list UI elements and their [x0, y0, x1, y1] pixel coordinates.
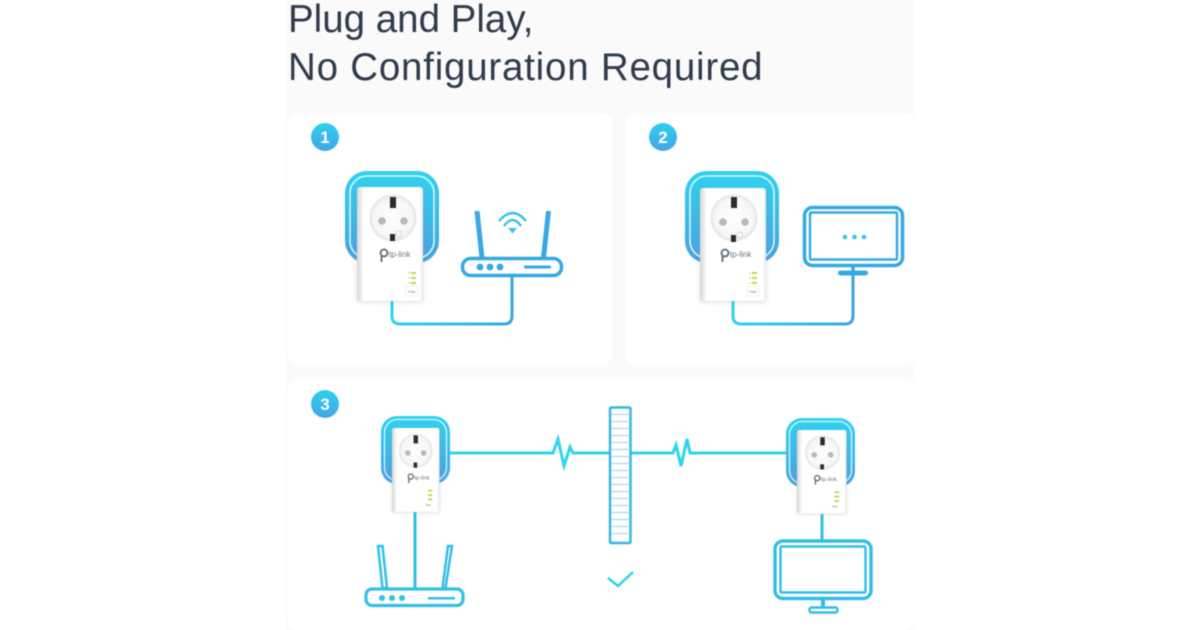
- left wall plate and adapter: tp-link: [414, 475, 430, 481]
- router: [462, 211, 562, 276]
- step 2 badge: 2: [658, 128, 668, 147]
- step 1 badge: [311, 123, 339, 151]
- left wall plate and adapter: Pair: [426, 503, 431, 507]
- right wall plate and adapter: Pair: [832, 504, 838, 508]
- step 1 badge: 1: [320, 128, 330, 147]
- title: No Configuration Required: [288, 46, 763, 89]
- panel: step 3: [288, 379, 915, 630]
- wall plate and adapter: Pair: [408, 289, 416, 294]
- wall plate and adapter: [685, 171, 779, 302]
- cable: left adapter to router: [414, 512, 416, 589]
- cable: adapter to router: [392, 276, 512, 324]
- background panel: [285, 0, 915, 630]
- step 2 badge: [649, 123, 677, 151]
- cable: adapter to monitor: [733, 272, 853, 324]
- monitor outline: [775, 541, 871, 612]
- monitor: [804, 208, 902, 275]
- router outline: [366, 546, 463, 606]
- panel: step 1: [288, 113, 612, 365]
- left wall plate and adapter: [381, 416, 450, 513]
- step 3 badge: [311, 390, 339, 418]
- icon: check mark: [608, 572, 633, 586]
- right wall plate and adapter: tp-link: [821, 477, 837, 483]
- powerline with interference: [449, 439, 787, 466]
- wall: [610, 408, 630, 543]
- wall plate and adapter: tp-link: [389, 250, 411, 259]
- panel: step 2: [626, 113, 915, 365]
- right wall plate and adapter: [786, 418, 855, 514]
- step 3 badge: 3: [320, 395, 330, 414]
- icon: wifi: [499, 213, 526, 234]
- wall plate and adapter: Pair: [749, 289, 757, 294]
- wall plate and adapter: tp-link: [730, 250, 752, 259]
- cable: right adapter to monitor: [820, 514, 824, 541]
- wall plate and adapter: [345, 171, 439, 302]
